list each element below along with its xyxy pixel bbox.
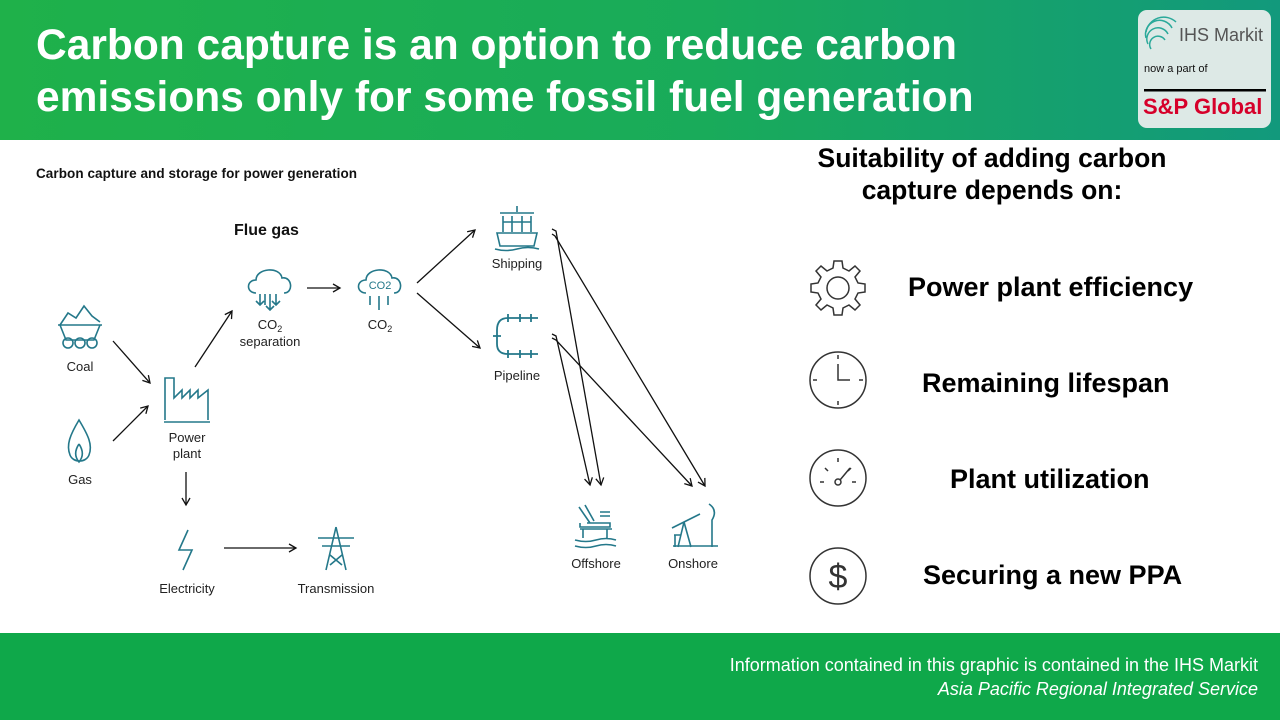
flue gas label: Flue gas bbox=[234, 222, 299, 239]
header banner bbox=[0, 0, 1280, 140]
text: efficiency: Power plant efficiency bbox=[908, 272, 1193, 302]
icon: power plant bbox=[164, 378, 210, 422]
logo: now a part of bbox=[1144, 63, 1209, 75]
diagram: Electricity bbox=[159, 581, 215, 596]
diagram: Shipping bbox=[492, 256, 542, 271]
footer bbox=[0, 633, 1280, 720]
icon: co2 bbox=[358, 270, 401, 310]
diagram subtitle: Carbon capture and storage for power generation bbox=[36, 166, 357, 181]
right heading: Suitability of adding carbon bbox=[818, 143, 1166, 173]
text: ppa: Securing a new PPA bbox=[923, 560, 1182, 590]
icon: co2 separation bbox=[248, 270, 291, 310]
icon: gas bbox=[68, 420, 90, 462]
right heading bbox=[818, 143, 1166, 205]
diagram: Gas bbox=[68, 472, 92, 487]
diagram: separation bbox=[240, 334, 300, 349]
text: utilization: Plant utilization bbox=[950, 464, 1150, 494]
title bbox=[36, 22, 974, 121]
title: emissions only for some fossil fuel generation bbox=[36, 74, 974, 121]
right heading: capture depends on: bbox=[862, 175, 1122, 205]
diagram: 2 bbox=[277, 324, 282, 334]
icon: transmission bbox=[318, 527, 354, 570]
factor list bbox=[809, 260, 1193, 605]
icon: dollar: $ bbox=[829, 558, 848, 596]
diagram: Transmission bbox=[298, 581, 374, 596]
diagram: plant bbox=[173, 446, 201, 461]
diagram: CO bbox=[258, 317, 277, 332]
footer text: Information contained in this graphic is contained in the IHS Markit bbox=[730, 655, 1258, 675]
icon: gear bbox=[810, 260, 866, 316]
diagram: Power bbox=[169, 430, 206, 445]
icon: shipping bbox=[495, 206, 539, 250]
footer text bbox=[730, 655, 1258, 699]
diagram: Offshore bbox=[571, 556, 621, 571]
icon: electricity bbox=[179, 530, 192, 570]
diagram: CO bbox=[368, 317, 387, 332]
diagram: Pipeline bbox=[494, 368, 540, 383]
logo: IHS Markit bbox=[1179, 25, 1263, 45]
icon: dollar bbox=[809, 547, 867, 605]
diagram: 2 bbox=[387, 324, 392, 334]
icon: onshore bbox=[672, 504, 718, 547]
diagram: CO2 bbox=[369, 280, 391, 292]
icon: coal bbox=[58, 306, 102, 348]
text: lifespan: Remaining lifespan bbox=[922, 368, 1170, 398]
logo bbox=[1138, 10, 1271, 128]
arrows bbox=[113, 229, 705, 548]
icon: pipeline bbox=[493, 314, 538, 358]
diagram: Coal bbox=[67, 359, 93, 374]
icon: offshore bbox=[575, 505, 616, 548]
diagram bbox=[36, 166, 718, 596]
diagram: Onshore bbox=[668, 556, 718, 571]
footer text: Asia Pacific Regional Integrated Service bbox=[938, 679, 1258, 699]
logo: S&P Global bbox=[1143, 94, 1262, 119]
title: Carbon capture is an option to reduce carbon bbox=[36, 22, 957, 69]
icon: clock bbox=[809, 351, 867, 409]
icon: gauge bbox=[809, 449, 867, 507]
